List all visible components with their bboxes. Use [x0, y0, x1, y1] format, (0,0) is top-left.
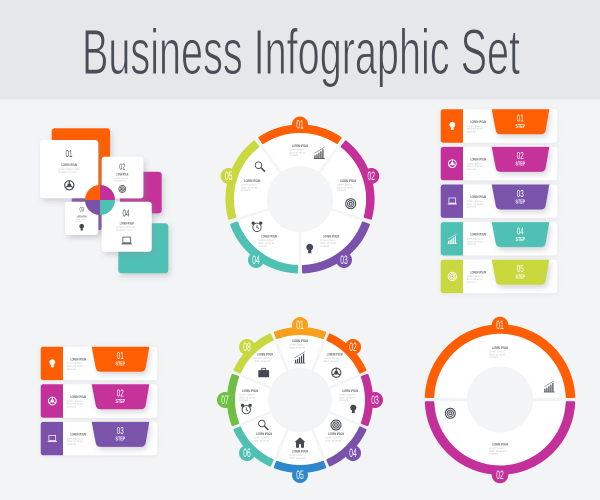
- text and icon 03: dolor sit amet: [320, 241, 336, 245]
- step row 02: [41, 384, 157, 418]
- panel: eight-step wheel: [217, 317, 383, 483]
- step row 01: [441, 109, 557, 143]
- step row 02: dolor sit amet: [467, 164, 483, 168]
- card 02: LOREM IPSUM: [116, 173, 128, 177]
- centre hole: [268, 368, 332, 432]
- text and icon 02: consect: [337, 188, 346, 192]
- card 01: [40, 140, 98, 198]
- text and icon 05: [289, 437, 308, 460]
- centre hole: [267, 166, 333, 232]
- text and icon 03: LOREM IPSUM: [323, 234, 339, 238]
- step row 03: consect: [67, 442, 76, 446]
- step row 04: 04: [517, 225, 524, 237]
- text and icon 01: [289, 338, 308, 363]
- step row 02: consect: [67, 404, 76, 408]
- text and icon 06: Lorem ipsum: [253, 436, 269, 440]
- text and icon 03: Lorem ipsum: [320, 239, 336, 242]
- step row 01: Lorem ipsum: [467, 125, 482, 128]
- text block 01: LOREM IPSUM: [492, 345, 508, 350]
- icon: target: [445, 408, 455, 418]
- segment 07: 07: [221, 395, 229, 407]
- step row 02: LOREM IPSUM: [70, 394, 87, 399]
- text and icon 02: [324, 352, 343, 377]
- text and icon 05: [241, 162, 265, 192]
- card 01: Lorem ipsum dolo: [58, 168, 79, 171]
- step row 03: dolor sit amet: [67, 439, 83, 443]
- segment 04: 04: [349, 448, 357, 460]
- text block 01: consect: [489, 355, 499, 359]
- text and icon 04: dolor sit amet: [258, 241, 274, 245]
- step row 02: Lorem ipsum: [467, 162, 482, 165]
- step row 02: dolor sit amet: [67, 402, 83, 406]
- segment 05: [218, 138, 259, 220]
- step row 04: [441, 222, 557, 256]
- text and icon 05: LOREM IPSUM: [244, 178, 261, 183]
- step row 01: consect: [67, 367, 76, 371]
- panel: overlapping square cards: [40, 128, 168, 273]
- text and icon 03: consect: [320, 244, 330, 248]
- segment 06: 06: [243, 448, 251, 460]
- text and icon 08: [254, 352, 273, 377]
- white disc: [233, 333, 367, 467]
- step row 05: [441, 260, 557, 293]
- step row 05: LOREM IPSUM: [470, 269, 487, 274]
- card 02: Lorem ipsum: [114, 177, 128, 180]
- step row 01: LOREM IPSUM: [470, 119, 487, 124]
- white disc: [232, 131, 368, 267]
- step row 01: [41, 347, 157, 380]
- step row 03: 03: [517, 188, 524, 200]
- text block 01: Lorem ipsum: [489, 350, 505, 354]
- step row 05: 05: [517, 263, 524, 275]
- text and icon 04: [325, 420, 344, 442]
- text and icon 04: [252, 222, 278, 248]
- step row 01: Lorem ipsum: [67, 362, 82, 365]
- step row 03: [41, 422, 157, 455]
- segment 05: [275, 462, 325, 483]
- text and icon 05: dolor sit amet: [289, 456, 305, 460]
- segment 01: [426, 317, 574, 397]
- text and icon 06: LOREM IPSUM: [256, 431, 272, 436]
- segment 02: [341, 138, 382, 220]
- panel: three step list: [41, 347, 157, 455]
- text and icon 04: Lorem ipsum: [325, 436, 341, 440]
- step row 05: consect: [467, 280, 476, 284]
- step row 04: LOREM IPSUM: [470, 232, 487, 237]
- segment 01: [259, 116, 341, 143]
- text and icon 02: [337, 178, 356, 209]
- step row 05: STEP: [516, 274, 525, 280]
- card 04: 04: [122, 208, 130, 219]
- text and icon 02: Lorem ipsum: [337, 184, 352, 186]
- panel: two-step ring: [426, 317, 574, 483]
- icon: chart: [544, 381, 555, 392]
- step row 05: dolor sit amet: [467, 277, 483, 281]
- card 04: LOREM IPSUM: [120, 220, 134, 225]
- step row 02: 02: [517, 150, 524, 162]
- card 03: LOREM IPSUM: [77, 214, 87, 218]
- text block 02: dolor sit amet: [489, 449, 505, 453]
- segment 05: 05: [296, 470, 304, 482]
- segment 04: 04: [252, 255, 260, 267]
- text block 02: LOREM IPSUM: [492, 442, 508, 446]
- step row 02: LOREM IPSUM: [470, 157, 487, 162]
- step row 04: STEP: [516, 237, 525, 243]
- step row 01: STEP: [516, 124, 525, 130]
- segment 01: [275, 317, 325, 338]
- card 04: Lorem ipsum do: [116, 226, 135, 229]
- text and icon 01: Lorem ipsum: [289, 148, 305, 152]
- step row 01: 01: [517, 113, 524, 125]
- step row 01: consect: [467, 129, 476, 133]
- step row 02: consect: [467, 167, 476, 171]
- step row 03: LOREM IPSUM: [70, 432, 87, 437]
- text and icon 02: LOREM IPSUM: [340, 178, 356, 183]
- segment 01: 01: [496, 320, 504, 332]
- text and icon 01: LOREM IPSUM: [292, 143, 308, 148]
- text and icon 01: Lorem ipsum: [289, 344, 305, 346]
- panel: five step list: [441, 109, 557, 293]
- card 03: 03: [79, 206, 84, 214]
- step row 01: dolor sit amet: [67, 364, 83, 368]
- segment 03: [362, 375, 383, 425]
- text and icon 06: dolor sit amet: [253, 438, 269, 442]
- text and icon 01: consect: [289, 153, 299, 157]
- text block 02: consect: [489, 452, 499, 456]
- text and icon 03: Lorem ipsum: [339, 394, 355, 396]
- segment 03: 03: [371, 395, 379, 407]
- card 02: sit amet co: [114, 180, 126, 183]
- step row 02: Lorem ipsum: [67, 400, 82, 403]
- text and icon 05: LOREM IPSUM: [292, 448, 308, 454]
- card 01: sit amet consec: [58, 170, 77, 174]
- text and icon 04: Lorem ipsum: [258, 239, 274, 242]
- text block 01: dolor sit amet: [489, 352, 505, 356]
- segment 03: [300, 220, 376, 282]
- step row 03: 03: [117, 425, 124, 437]
- centre hole: [467, 366, 533, 432]
- text and icon 02: Lorem ipsum: [324, 357, 339, 360]
- card 02: 02: [119, 162, 125, 172]
- text and icon 07: [239, 388, 258, 414]
- text and icon 03: LOREM IPSUM: [342, 388, 358, 393]
- segment 04: [326, 426, 369, 469]
- text and icon 01: LOREM IPSUM: [292, 338, 308, 343]
- segment 02: [426, 402, 574, 483]
- text and icon 01: dolor sit amet: [289, 150, 305, 154]
- text and icon 05: consect: [241, 188, 251, 192]
- teal square: [118, 223, 168, 273]
- step row 03: consect: [467, 205, 476, 209]
- step row 03: STEP: [516, 199, 525, 205]
- text and icon 07: LOREM IPSUM: [242, 388, 258, 393]
- text and icon 04: LOREM IPSUM: [328, 431, 344, 436]
- segment 01: 01: [296, 120, 304, 132]
- step row 01: 01: [117, 350, 124, 362]
- card 01: LOREM IPSUM: [61, 162, 78, 167]
- card 03: sit amet: [75, 220, 82, 223]
- segment 02: 02: [368, 171, 375, 183]
- card 04: sit amet cons: [116, 228, 132, 232]
- step row 05: Lorem ipsum: [467, 275, 482, 278]
- text and icon 03: consect: [339, 398, 349, 402]
- card 04: [102, 202, 152, 252]
- step row 01: LOREM IPSUM: [70, 356, 87, 361]
- text block 02: Lorem ipsum: [489, 447, 505, 450]
- step row 04: Lorem ipsum: [467, 238, 482, 241]
- card 02: [102, 157, 143, 198]
- text and icon 01: dolor sit amet: [289, 345, 305, 349]
- step row 04: dolor sit amet: [467, 239, 483, 243]
- text and icon 03: dolor sit amet: [339, 395, 355, 399]
- segment 08: 08: [243, 342, 251, 354]
- text and icon 05: Lorem ipsum: [241, 184, 257, 186]
- orange square: [52, 128, 110, 187]
- step row 02: STEP: [116, 399, 125, 405]
- magenta square: [120, 172, 162, 213]
- segment 02: [326, 331, 369, 374]
- panel: five-step wheel: [218, 116, 382, 282]
- text and icon 06: [253, 420, 272, 442]
- card 03: Lorem ipsum: [75, 219, 87, 221]
- text and icon 08: dolor sit amet: [254, 359, 270, 363]
- segment 03: 03: [340, 255, 348, 267]
- step row 03: Lorem ipsum: [67, 437, 82, 440]
- step row 01: dolor sit amet: [467, 127, 483, 131]
- text and icon 04: LOREM IPSUM: [261, 234, 278, 238]
- text and icon 07: consect: [239, 398, 249, 402]
- step row 02: 02: [117, 388, 124, 400]
- text and icon 05: dolor sit amet: [241, 185, 257, 189]
- step row 02: [441, 147, 557, 180]
- step row 03: STEP: [116, 437, 125, 443]
- text and icon 02: dolor sit amet: [337, 185, 353, 189]
- text and icon 02: LOREM IPSUM: [327, 352, 343, 356]
- white disc: [432, 332, 568, 468]
- text and icon 08: LOREM IPSUM: [257, 352, 273, 356]
- segment 01: 01: [296, 320, 304, 332]
- text block 01: [489, 345, 508, 359]
- segment 02: 02: [496, 470, 504, 482]
- step row 02: STEP: [516, 162, 525, 168]
- segment 04: [224, 220, 300, 282]
- text and icon 02: dolor sit amet: [324, 359, 340, 363]
- text and icon 05: Lorem ipsum: [289, 454, 305, 457]
- text and icon 01: [289, 143, 325, 159]
- segment 05: 05: [225, 171, 232, 183]
- text and icon 03: [306, 234, 339, 253]
- step row 04: consect: [467, 242, 476, 246]
- text and icon 07: dolor sit amet: [239, 395, 255, 399]
- segment 02: 02: [349, 342, 357, 354]
- text and icon 04: dolor sit amet: [325, 438, 341, 442]
- text block 02: [489, 442, 508, 456]
- header band: [0, 0, 600, 100]
- text and icon 03: [339, 388, 358, 413]
- step row 03: LOREM IPSUM: [470, 194, 487, 199]
- purple square: [72, 198, 102, 230]
- centre quadrant circle: [85, 185, 115, 215]
- segment 07: [217, 375, 238, 425]
- segment 08: [231, 331, 274, 374]
- step row 03: dolor sit amet: [467, 202, 483, 206]
- text and icon 07: Lorem ipsum: [239, 394, 255, 396]
- step row 01: STEP: [116, 362, 125, 368]
- step row 03: [441, 184, 557, 218]
- card 03: [65, 202, 98, 235]
- segment 06: [231, 426, 274, 469]
- text and icon 08: Lorem ipsum: [254, 357, 270, 360]
- card 01: 01: [66, 149, 73, 160]
- step row 03: Lorem ipsum: [467, 200, 482, 203]
- text and icon 04: consect: [258, 244, 268, 248]
